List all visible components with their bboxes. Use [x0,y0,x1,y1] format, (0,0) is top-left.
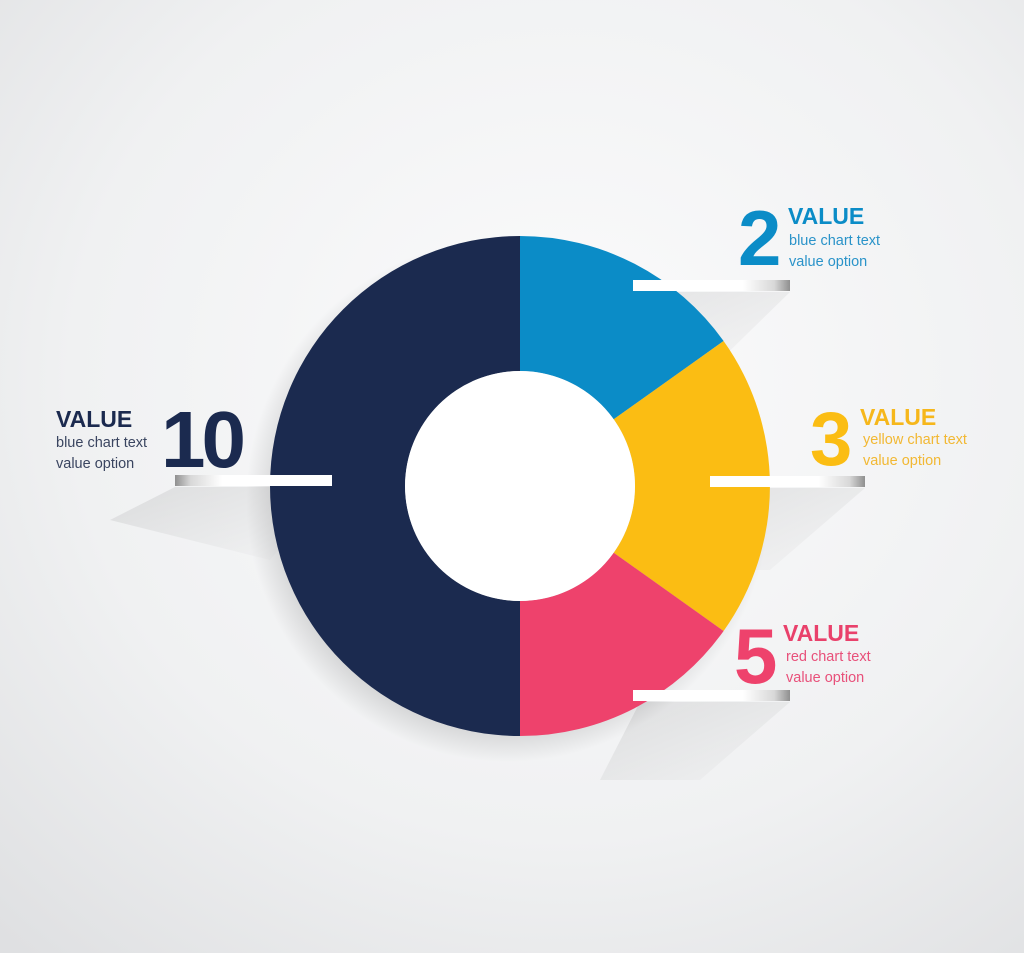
label: 3 yellow: yellow chart text [863,432,967,448]
label: 5 red: VALUE [783,620,859,646]
label: 3 yellow: value option [863,453,941,469]
label: 2 blue: value option [789,254,867,270]
label: 3 yellow: VALUE [860,404,936,430]
label: 10 navy: blue chart text [56,435,147,451]
label: 10 navy [56,395,243,484]
label: 2 blue: VALUE [788,203,864,229]
shelf: 10 [175,475,332,486]
shelf: 3 [710,476,865,487]
label: 10 navy: 10 [161,395,243,484]
label: 10 navy: value option [56,456,134,472]
segment: yellow 3 [614,341,770,631]
label: 5 red [734,612,871,700]
label: 3 yellow [810,397,967,482]
shelf: 5 [633,690,790,701]
long shadows [110,292,865,780]
shelf: 2 [633,280,790,291]
donut hole [405,371,635,601]
circle shadow [246,238,770,762]
segment: red 5 [520,553,724,736]
label: 5 red: red chart text [786,649,871,665]
label: 2 blue [738,194,880,282]
segment: blue 2 [520,236,724,419]
label: 5 red: 5 [734,612,777,700]
label: 5 red: value option [786,670,864,686]
label: 2 blue: 2 [738,194,781,282]
label: 10 navy: VALUE [56,406,132,432]
label: 2 blue: blue chart text [789,233,880,249]
donut chart [270,236,770,736]
label: 3 yellow: 3 [810,397,852,482]
segment: navy 10 [270,236,520,736]
